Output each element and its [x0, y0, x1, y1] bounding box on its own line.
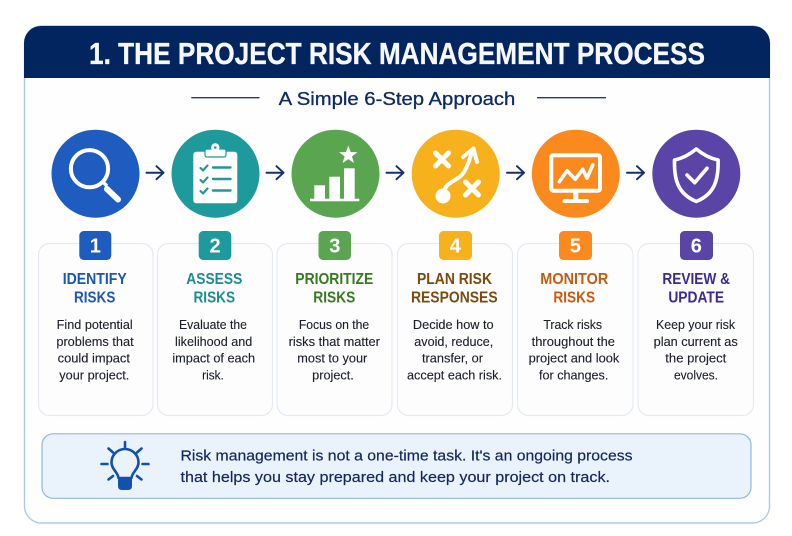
icon: clipboard checklist: [172, 130, 260, 218]
callout text: Risk management is not a one-time task. It's an ongoing process: [180, 448, 632, 465]
step 6: review and update: [638, 130, 754, 415]
description 3: Focus on the: [299, 318, 369, 332]
description 4: [407, 318, 502, 382]
step 3: prioritize risks: [277, 130, 392, 415]
heading 2: RISKS: [193, 290, 235, 307]
arrow 2 to 3: [266, 166, 284, 179]
step 4: plan risk responses: [398, 130, 512, 415]
heading 2: [186, 271, 243, 307]
badge 6: 6: [691, 236, 702, 258]
card 2: [158, 244, 272, 416]
description 6: Keep your risk: [656, 318, 736, 332]
heading 4: RESPONSES: [411, 290, 498, 307]
card 4: [398, 244, 512, 416]
description 6: [654, 318, 738, 382]
heading 5: MONITOR: [540, 271, 609, 288]
arrow 3 to 4: [386, 166, 404, 179]
card 6: [638, 244, 754, 416]
badge 5: [559, 231, 592, 260]
heading 5: [540, 271, 609, 307]
description 5: throughout the: [532, 335, 615, 349]
heading 1: RISKS: [74, 290, 116, 307]
description 4: Decide how to: [413, 318, 494, 332]
description 3: risks that matter: [289, 335, 380, 349]
description 4: accept each risk.: [407, 368, 502, 382]
card 3: [277, 244, 392, 416]
callout text: [180, 448, 632, 486]
icon: light bulb: [102, 442, 148, 490]
heading 4: [411, 271, 498, 307]
arrow 1 to 2: [146, 166, 164, 179]
heading 6: [662, 271, 730, 307]
card 5: [518, 244, 633, 416]
step 5: monitor risks: [518, 130, 633, 415]
icon: magnifying glass: [52, 130, 140, 218]
callout text: that helps you stay prepared and keep your project on track.: [180, 469, 610, 486]
description 3: [289, 318, 380, 382]
description 3: most to your: [297, 352, 367, 366]
heading 6: UPDATE: [668, 290, 724, 307]
description 6: the project: [665, 352, 727, 366]
description 2: impact of each: [172, 352, 255, 366]
arrow 4 to 5: [507, 166, 524, 179]
description 2: [172, 318, 255, 382]
badge 2: 2: [209, 236, 221, 258]
heading 3: [295, 271, 374, 307]
heading 1: IDENTIFY: [63, 271, 127, 288]
badge 1: [79, 231, 111, 260]
description 5: project and look: [529, 352, 620, 366]
badge 3: 3: [329, 236, 340, 258]
heading 1: [63, 271, 127, 307]
description 5: [529, 318, 620, 382]
description 6: evolves.: [674, 368, 718, 382]
title: 1. THE PROJECT RISK MANAGEMENT PROCESS: [89, 37, 705, 71]
badge 1: 1: [90, 236, 101, 258]
description 1: problems that: [56, 335, 134, 349]
heading 5: RISKS: [553, 290, 595, 307]
title banner: [24, 26, 770, 78]
description 5: Track risks: [543, 318, 602, 332]
description 1: could impact: [58, 352, 130, 366]
description 3: project.: [312, 368, 354, 382]
badge 2: [199, 231, 231, 260]
badge 5: 5: [570, 236, 581, 258]
card 1: [38, 244, 153, 416]
description 2: Evaluate the: [179, 318, 247, 332]
description 6: plan current as: [654, 335, 738, 349]
badge 4: [439, 231, 472, 260]
description 5: for changes.: [539, 368, 608, 382]
subtitle: A Simple 6-Step Approach: [279, 88, 515, 109]
heading 2: ASSESS: [186, 271, 243, 288]
description 1: Find potential: [57, 318, 133, 332]
icon: shield with check: [652, 130, 740, 218]
heading 6: REVIEW &: [662, 271, 730, 288]
badge 3: [318, 231, 351, 260]
badge 4: 4: [450, 236, 462, 258]
callout: [42, 434, 751, 498]
badge 6: [680, 231, 713, 260]
icon: monitor with trend line: [532, 130, 620, 218]
arrow 5 to 6: [627, 166, 644, 179]
description 1: [56, 318, 134, 382]
heading 4: PLAN RISK: [417, 271, 492, 288]
heading 3: RISKS: [313, 290, 356, 307]
description 4: avoid, reduce,: [414, 335, 493, 349]
icon: bar chart with star: [292, 130, 380, 218]
description 4: transfer, or: [422, 352, 483, 366]
step 1: identify risks: [38, 130, 153, 415]
icon: strategy play path: [412, 130, 500, 218]
description 2: risk.: [202, 368, 224, 382]
description 1: your project.: [59, 368, 129, 382]
step 2: assess risks: [158, 130, 272, 415]
description 2: likelihood and: [175, 335, 252, 349]
heading 3: PRIORITIZE: [295, 271, 374, 288]
